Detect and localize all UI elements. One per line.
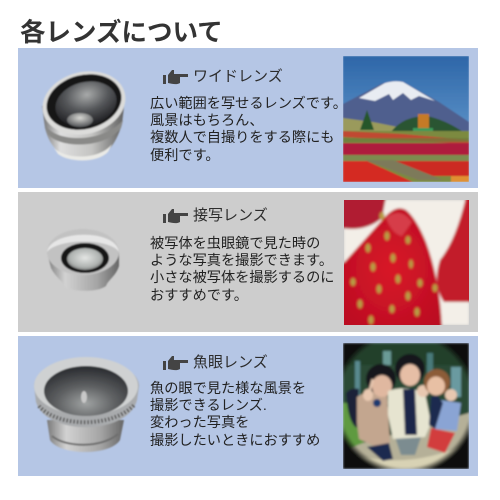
icon: wide lens product (41, 70, 126, 161)
description: 変わった写真を (150, 415, 249, 431)
panel: macro lens (18, 192, 478, 332)
icon: pointing hand (163, 70, 188, 84)
description: 撮影したいときにおすすめ (150, 433, 320, 449)
description (150, 96, 347, 164)
icon: pointing hand (163, 356, 188, 370)
description: おすすめです。 (150, 288, 248, 304)
description: 魚の眼で見た様な風景を (150, 381, 306, 397)
description: 便利です。 (150, 148, 220, 164)
description: 複数人で自撮りをする際にも (150, 130, 334, 146)
photo: strawberries (344, 200, 469, 325)
photo: mountain and tulips (343, 56, 469, 182)
description: ような写真を撮影できます。 (150, 253, 333, 269)
description: 被写体を虫眼鏡で見た時の (150, 236, 320, 252)
subheading: ワイドレンズ (193, 68, 283, 85)
icon: pointing hand (163, 209, 188, 224)
panel: wide lens (18, 48, 478, 188)
title: 各レンズについて (20, 19, 223, 47)
description: 小さな被写体を撮影するのに (150, 270, 334, 286)
description: 撮影できるレンズ. (150, 398, 267, 414)
subheading: 接写レンズ (193, 207, 268, 224)
description: 風景はもちろん、 (150, 113, 264, 129)
subheading: 魚眼レンズ (193, 354, 268, 371)
description (150, 380, 320, 449)
icon: macro lens product (48, 230, 120, 291)
panel: fisheye lens (18, 336, 478, 476)
icon: fisheye lens product (34, 356, 140, 452)
description: 広い範囲を写せるレンズです。 (150, 96, 347, 112)
photo: three women fisheye (343, 343, 469, 469)
description (150, 236, 334, 304)
